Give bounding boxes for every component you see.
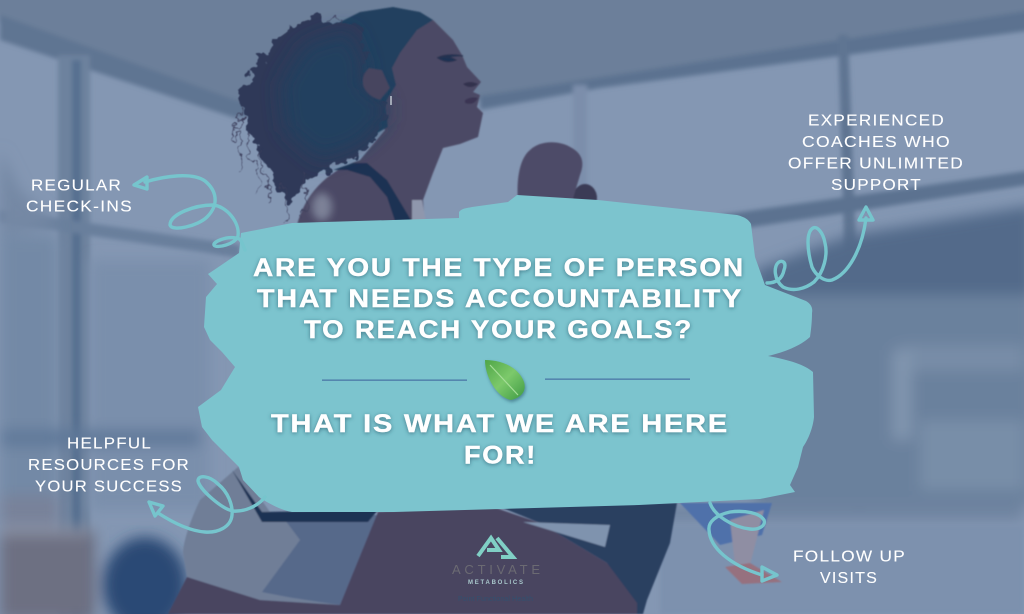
label: helpful resources <box>28 436 190 496</box>
leggings <box>490 503 677 614</box>
label: helpful resources: RESOURCES FOR <box>28 457 190 474</box>
heading: question: ARE YOU THE TYPE OF PERSON <box>253 254 745 282</box>
heading: question: THAT NEEDS ACCOUNTABILITY <box>257 285 743 313</box>
heading: answer <box>271 410 729 470</box>
logo: activate metabolics <box>452 538 540 603</box>
heading: question <box>253 254 745 344</box>
waistband <box>232 470 378 522</box>
arrow: regular check-ins <box>134 176 245 250</box>
divider: right line <box>545 378 690 380</box>
logo wordmark: ACTIVATE <box>452 562 540 577</box>
arrow: follow up visits <box>709 503 777 581</box>
icon: leaf <box>485 360 525 400</box>
logo subtitle: METABOLICS <box>468 580 523 586</box>
earring <box>390 96 392 105</box>
label: experienced coaches: EXPERIENCED <box>808 112 945 130</box>
label: regular check-ins <box>26 178 133 216</box>
hair curls <box>237 15 342 222</box>
gap highlight <box>523 522 610 547</box>
label: regular check-ins: REGULAR <box>31 178 122 194</box>
label: experienced coaches: COACHES WHO <box>802 134 951 151</box>
label: regular check-ins: CHECK-INS <box>26 198 133 216</box>
logo mark <box>478 538 513 557</box>
label: experienced coaches <box>788 112 964 194</box>
heading: answer: THAT IS WHAT WE ARE HERE <box>271 410 729 438</box>
label: experienced coaches: SUPPORT <box>831 177 922 194</box>
rear shorts <box>680 503 772 545</box>
arrow: experienced coaches <box>767 207 873 289</box>
rear calf <box>730 510 764 565</box>
label: follow up visits: FOLLOW UP <box>793 548 906 566</box>
eye <box>437 55 463 62</box>
heading: answer: FOR! <box>464 442 537 470</box>
front thigh <box>168 506 637 614</box>
fist <box>518 142 582 202</box>
arm behind <box>573 184 597 212</box>
crown hair <box>335 7 433 150</box>
label: helpful resources: YOUR SUCCESS <box>35 478 183 496</box>
label: helpful resources: HELPFUL <box>67 436 152 452</box>
shorts <box>183 467 378 605</box>
divider: left line <box>322 380 467 381</box>
logo tagline: Point Functional Health <box>458 596 533 603</box>
tank strap <box>333 163 411 221</box>
hair inner shade <box>280 30 385 160</box>
heading: question: TO REACH YOUR GOALS? <box>304 316 693 344</box>
nostril <box>463 82 478 87</box>
panel: teal brush blob <box>198 195 814 512</box>
arrow: helpful resources <box>149 477 265 532</box>
mouth <box>465 97 478 104</box>
photo: woman exercising <box>168 7 782 614</box>
shoulder highlight <box>312 193 332 221</box>
rear shoe <box>725 563 782 584</box>
label: follow up visits <box>793 548 906 587</box>
ponytail hair <box>240 18 388 208</box>
skin: face, neck and shoulder <box>297 20 483 225</box>
label: follow up visits: VISITS <box>820 570 878 587</box>
label: experienced coaches: OFFER UNLIMITED <box>788 156 964 172</box>
tank top <box>412 200 426 222</box>
ear <box>363 68 390 100</box>
